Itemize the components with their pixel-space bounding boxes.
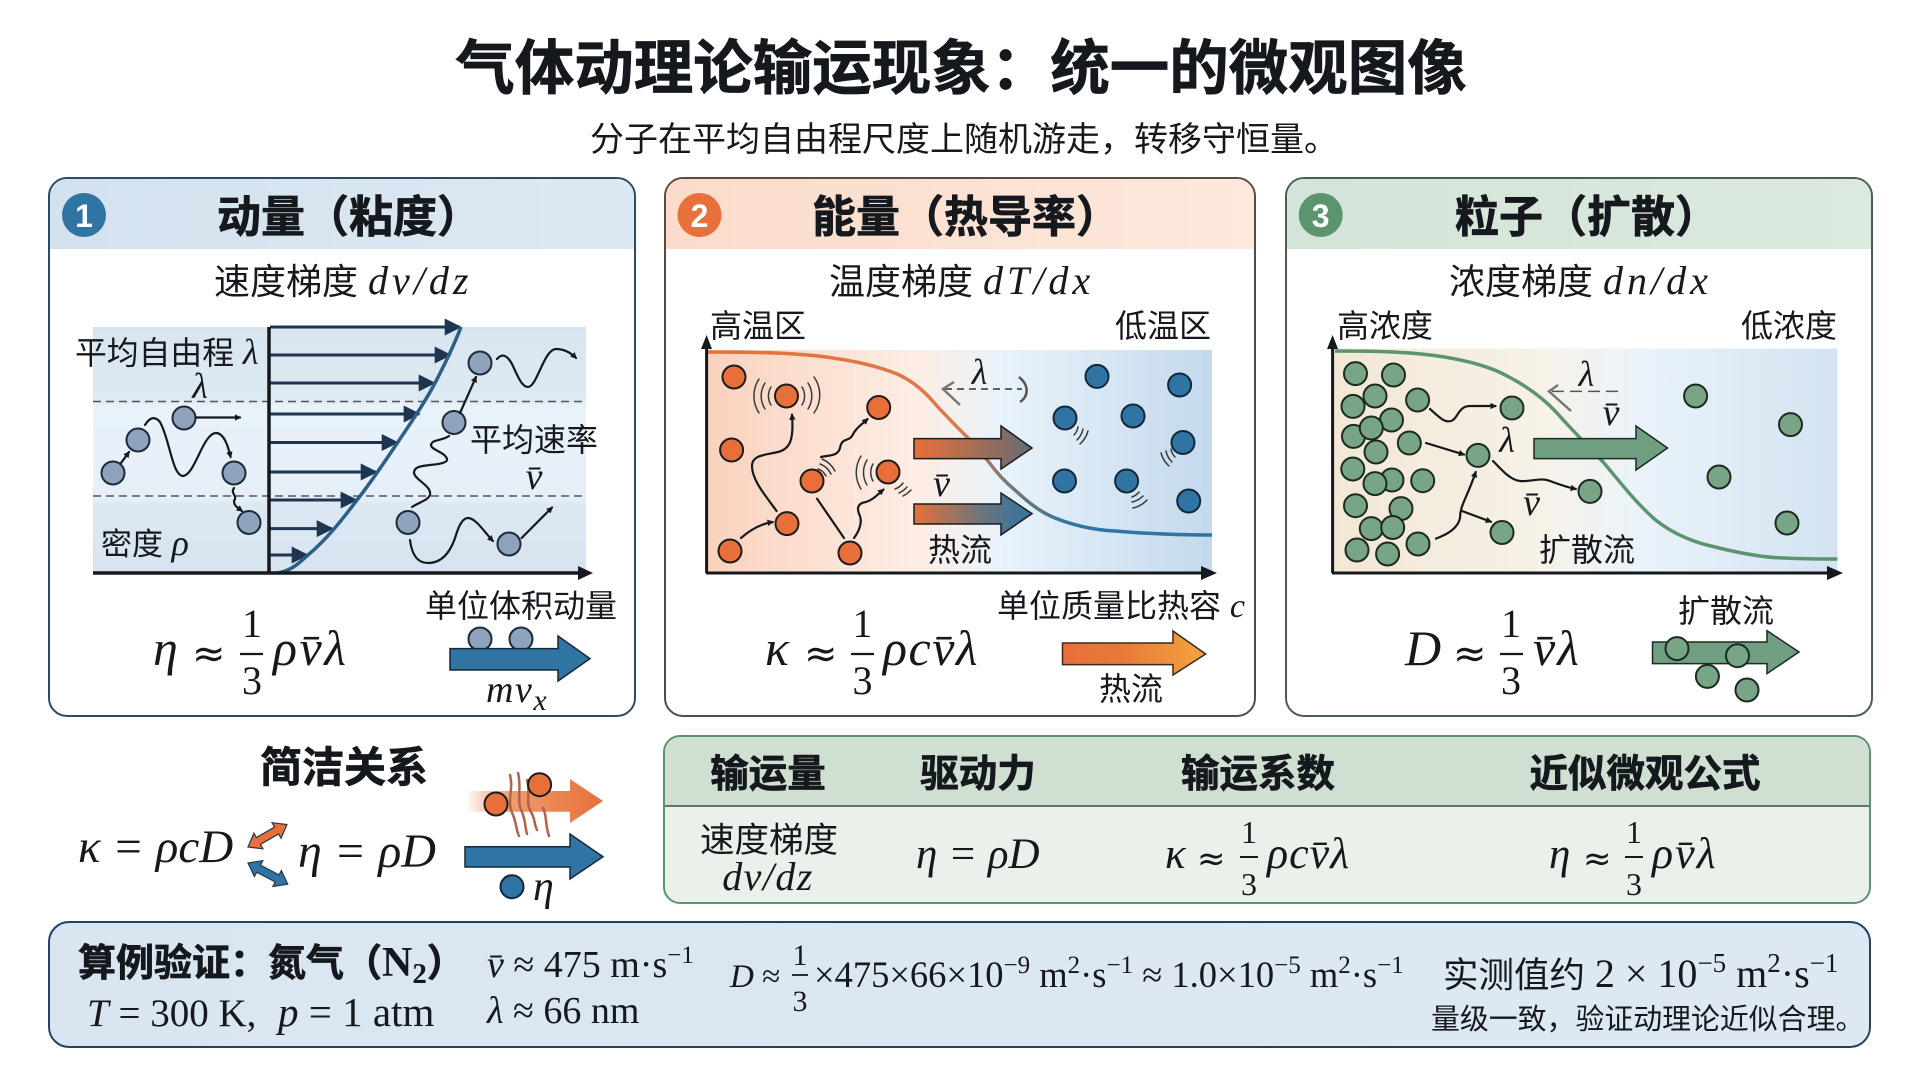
panel frame <box>1286 178 1872 716</box>
formula eta: 3 <box>242 658 262 703</box>
label mean speed: 平均速率 <box>470 422 598 458</box>
lambda dashed marker: λ <box>971 352 987 392</box>
D calculation: ×475×66×10 <box>814 954 1004 995</box>
temperature curve <box>707 352 1212 535</box>
hot molecules <box>718 366 911 564</box>
formula eta: η <box>153 620 178 676</box>
cell eta formula: 3 <box>1626 866 1642 902</box>
summary table <box>664 736 1870 903</box>
cell kappa formula: κ <box>1165 831 1187 878</box>
cell driving force gradient: 速度梯度 <box>700 822 838 860</box>
label momentum per volume: 单位体积动量 <box>425 588 617 624</box>
gradient label: 速度梯度 dv/dz <box>214 258 472 303</box>
column headers: 驱动力 <box>920 753 1036 796</box>
diffusion flow label: 扩散流 <box>1539 532 1635 568</box>
formula kappa: κ <box>765 620 790 676</box>
cell kappa formula: 3 <box>1241 866 1257 902</box>
diffusing molecules with paths <box>1426 396 1602 544</box>
column headers: 输运系数 <box>1181 753 1335 796</box>
D calculation: ≈ 1.0×10 <box>1133 954 1274 995</box>
panel: energy thermal conductivity <box>665 178 1255 716</box>
D calculation: m <box>1301 954 1338 995</box>
example heading: 2 <box>412 958 427 990</box>
cold molecules <box>1053 365 1200 512</box>
double arrow blue <box>244 855 292 892</box>
diffusion arrow <box>1534 426 1668 470</box>
v-bar symbol: v̄ <box>1523 482 1540 524</box>
cell kappa formula <box>1165 814 1350 902</box>
label specific heat: 单位质量比热容 c <box>997 588 1245 625</box>
panel: worked example nitrogen <box>49 922 1870 1047</box>
cell driving force gradient: dv/dz <box>722 854 814 899</box>
panel frame <box>665 178 1255 716</box>
label low concentration: 低浓度 <box>1741 308 1837 344</box>
measured value: 实测值约 2 × 10 <box>1443 951 1697 996</box>
label mv_x: mv <box>486 669 533 711</box>
D calculation: 1 <box>792 939 808 972</box>
gradient label: 温度梯度 dT/dx <box>829 258 1094 303</box>
D calculation: 3 <box>792 985 808 1018</box>
axes <box>701 335 1217 580</box>
momentum arrow with molecules <box>450 628 590 681</box>
D calculation: ·s <box>1351 954 1377 995</box>
badge 3: 3 <box>1312 198 1330 234</box>
badge 3 <box>1299 193 1343 237</box>
formula D: 3 <box>1501 658 1521 703</box>
gradient label: 浓度梯度 dn/dx <box>1449 258 1712 303</box>
panel heading: 能量（热导率） <box>812 193 1120 242</box>
heat flux arrow upper <box>914 426 1032 469</box>
D calculation: −5 <box>1274 952 1301 979</box>
cell kappa formula: ≈ <box>1197 839 1226 879</box>
conditions temperature: T = 300 K, <box>87 992 256 1035</box>
cell eta formula: ≈ <box>1583 839 1612 879</box>
velocity profile curve <box>277 327 461 573</box>
D calculation: 2 <box>1338 952 1351 979</box>
column headers: 输运量 <box>710 753 826 796</box>
panel: concise relations <box>78 744 603 910</box>
formula D: 1 <box>1501 601 1521 646</box>
formula kappa: ≈ <box>804 631 838 677</box>
right molecules with path <box>396 349 576 563</box>
panel background <box>49 922 1870 1047</box>
mean free path value: λ ≈ 66 nm <box>486 990 639 1032</box>
lambda dashed marker <box>943 352 1027 405</box>
formula eta: 1 <box>242 601 262 646</box>
label mv_x: x <box>532 684 548 717</box>
label low temperature: 低温区 <box>1115 308 1211 344</box>
column headers: 近似微观公式 <box>1529 753 1761 796</box>
D calculation: −1 <box>1377 952 1404 979</box>
formula kappa: 1 <box>852 601 872 646</box>
heat flow label: 热流 <box>1099 671 1163 707</box>
label high temperature: 高温区 <box>710 308 806 344</box>
formula kappa: 3 <box>852 658 872 703</box>
subtitle: 分子在平均自由程尺度上随机游走，转移守恒量。 <box>590 121 1338 159</box>
concentration curve <box>1335 351 1838 559</box>
velocity profile chart <box>93 327 593 580</box>
v-bar symbol: v̄ <box>526 456 543 498</box>
eta molecule marker: η <box>533 864 554 910</box>
panel heading: 粒子（扩散） <box>1455 193 1719 242</box>
title: 气体动理论输运现象：统一的微观图像 <box>455 35 1467 102</box>
heat flow label: 热流 <box>928 532 992 568</box>
diffusion flow label: 扩散流 <box>1678 593 1774 629</box>
column headers <box>710 753 1761 796</box>
lambda marker <box>1549 354 1622 411</box>
formula D: ≈ <box>1453 631 1487 677</box>
cell eta formula: ρv̄λ <box>1650 829 1718 878</box>
conditions pressure: p = 1 atm <box>275 989 434 1035</box>
cell kappa formula: 1 <box>1241 814 1257 850</box>
label high concentration: 高浓度 <box>1337 308 1433 344</box>
measured value: ·s <box>1781 951 1810 996</box>
double arrow orange <box>244 817 291 855</box>
formula D: D <box>1404 620 1441 676</box>
formula eta: ≈ <box>192 631 226 677</box>
temperature chart <box>701 335 1217 580</box>
example heading: 算例验证：氮气（N <box>78 940 412 986</box>
cell eta formula: η <box>1549 831 1570 878</box>
label mean free path: 平均自由程 λ <box>75 332 258 372</box>
measured value: 2 <box>1767 948 1781 978</box>
left molecules with path <box>102 406 260 534</box>
badge 1: 1 <box>75 198 93 234</box>
badge 1 <box>62 193 106 237</box>
heat flux arrow lower <box>914 493 1032 535</box>
D calculation: D ≈ <box>729 959 780 995</box>
badge 2 <box>678 193 722 237</box>
panel header band <box>50 179 634 249</box>
panel header band <box>666 179 1254 249</box>
conclusion: 量级一致，验证动理论近似合理。 <box>1431 1004 1864 1036</box>
velocity arrows <box>270 327 460 555</box>
cell kappa formula: ρcv̄λ <box>1265 829 1350 878</box>
v-bar symbol: v̄ <box>933 463 950 505</box>
mean speed value: −1 <box>667 942 694 969</box>
measured value: −1 <box>1810 948 1838 978</box>
lambda symbol: λ <box>1498 420 1515 460</box>
panel frame <box>49 178 635 716</box>
table body <box>664 736 1870 903</box>
D calculation: −1 <box>1107 952 1133 979</box>
crowded molecules <box>1341 362 1434 566</box>
example heading: ） <box>427 943 465 985</box>
formula kappa: ρcv̄λ <box>881 620 979 676</box>
D calculation: 2 <box>1068 952 1080 979</box>
axes <box>1327 335 1843 580</box>
heat flow arrow <box>1062 631 1206 675</box>
formula eta <box>153 601 348 703</box>
D calculation: ·s <box>1080 954 1107 995</box>
lambda symbol: λ <box>191 366 208 406</box>
cell driving force gradient <box>700 822 838 899</box>
formula kappa <box>765 601 979 703</box>
formula D <box>1404 601 1581 703</box>
panel: momentum viscosity <box>49 178 635 717</box>
D calculation: m <box>1030 954 1068 995</box>
table header row <box>665 737 1869 806</box>
badge 2: 2 <box>691 198 708 234</box>
heading: 简洁关系 <box>260 744 428 791</box>
cell eta formula <box>1549 814 1718 902</box>
formula eta: ρv̄λ <box>271 620 348 676</box>
measured value: −5 <box>1697 948 1726 978</box>
D calculation: −9 <box>1004 952 1030 979</box>
viscosity arrow icon <box>465 834 603 879</box>
heat arrow icon <box>466 773 603 836</box>
concentration chart <box>1327 335 1843 580</box>
lambda marker: λ <box>1578 354 1594 394</box>
measured value: m <box>1726 951 1767 996</box>
sparse molecules <box>1684 384 1802 534</box>
panel header band <box>1287 179 1871 249</box>
cell eta relation: η = ρD <box>916 831 1040 878</box>
relation eta: η = ρD <box>298 825 436 878</box>
relation kappa: κ = ρcD <box>78 821 233 873</box>
cell eta formula: 1 <box>1626 814 1642 850</box>
v-bar symbol: v̄ <box>1603 392 1620 434</box>
axes <box>93 327 593 580</box>
formula D: v̄λ <box>1533 620 1581 676</box>
D calculation <box>729 939 1404 1018</box>
mean speed value: v̄ ≈ 475 m·s <box>487 944 667 986</box>
label density: 密度 ρ <box>101 523 189 563</box>
panel: particle diffusion <box>1286 178 1872 716</box>
diffusion arrow with molecules <box>1652 631 1799 702</box>
panel heading: 动量（粘度） <box>217 193 481 242</box>
eta molecule marker <box>500 864 554 910</box>
